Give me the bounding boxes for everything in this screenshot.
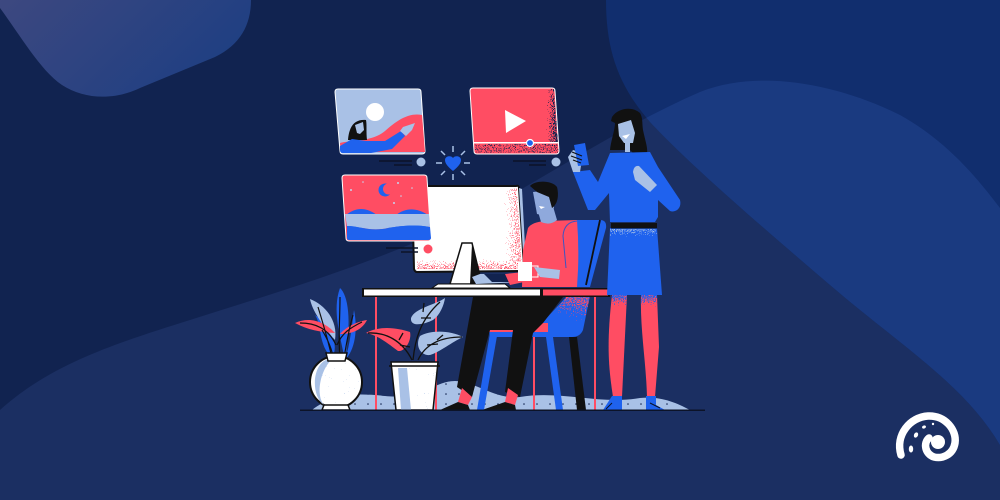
ground line (300, 410, 705, 411)
monitor (386, 186, 526, 288)
desk (362, 288, 610, 297)
icon: heart with rays (436, 146, 470, 180)
night landscape card (342, 175, 431, 241)
video card: play button (470, 88, 559, 154)
plant in round vase (295, 288, 367, 410)
standing woman (568, 109, 680, 410)
image card: woman and sun (335, 89, 425, 154)
plant in square pot (366, 298, 463, 410)
ground bumps (312, 381, 690, 410)
logo (900, 416, 955, 457)
motion lines and dots beside cards (379, 158, 560, 166)
desk legs (375, 297, 596, 410)
chair (477, 220, 606, 410)
seated man (440, 182, 578, 410)
